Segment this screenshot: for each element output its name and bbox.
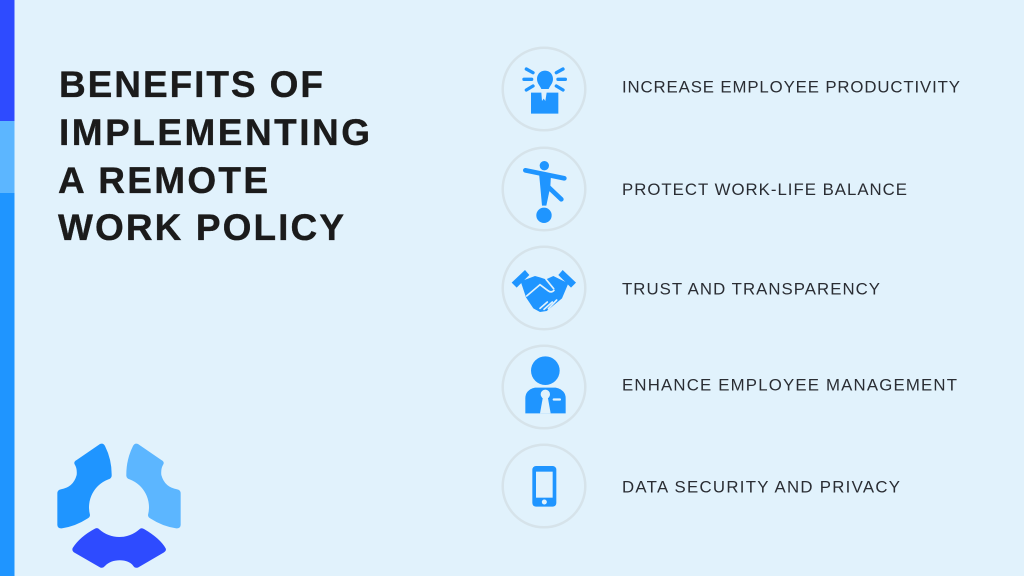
label: TRUST AND TRANSPARENCY [622,280,880,299]
icon: handshake [503,247,585,329]
icon: person with tie [503,346,585,428]
left colour bar [0,0,14,576]
icon: smartphone [503,445,585,527]
label: INCREASE EMPLOYEE PRODUCTIVITY [622,78,960,97]
logo [57,444,181,568]
item: data security and privacy [503,445,900,527]
item: enhance employee management [503,346,957,428]
label: PROTECT WORK-LIFE BALANCE [622,180,907,199]
icon: person balancing on ball [503,148,585,230]
item: trust and transparency [503,247,880,329]
icon: lightbulb over box [503,48,585,130]
title: A REMOTE [58,160,268,201]
item: protect work-life balance [503,148,907,230]
logo: right segment [126,444,181,528]
title [58,64,370,248]
item: increase employee productivity [503,48,960,130]
label: ENHANCE EMPLOYEE MANAGEMENT [622,376,957,395]
logo: left segment [57,444,112,528]
title: WORK POLICY [58,207,344,248]
label: DATA SECURITY AND PRIVACY [622,478,900,497]
title: BENEFITS OF [59,64,323,105]
title: IMPLEMENTING [59,112,370,153]
logo: bottom segment [72,528,166,568]
